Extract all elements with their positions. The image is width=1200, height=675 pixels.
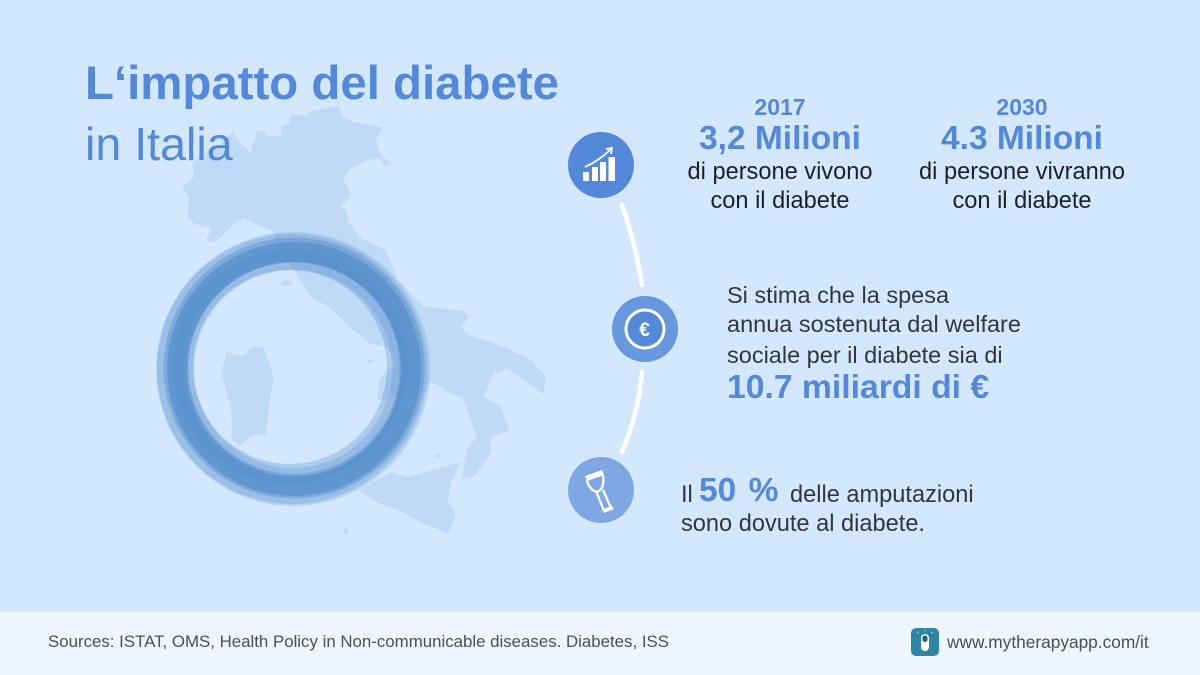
year 2017: 2017 (754, 94, 806, 120)
caption 2017 (688, 159, 872, 214)
footer (0, 612, 1200, 675)
amputations line 1: Il (681, 482, 693, 508)
connector: bottom arc (622, 372, 642, 452)
value 4.3 Milioni: 4.3 Milioni (941, 120, 1103, 157)
icon: euro coin: € (639, 320, 650, 341)
icon: euro coin (612, 296, 678, 362)
welfare text last line: sociale per il diabete sia di (727, 342, 1003, 368)
text block: welfare cost (727, 282, 1021, 406)
website: www.mytherapyapp.com/it (947, 632, 1149, 652)
amputations line 1: delle amputazioni (790, 482, 974, 508)
icon: growth chart (568, 132, 634, 198)
subtitle: in Italia (85, 118, 233, 170)
welfare text (727, 282, 1021, 337)
title: L‘impatto del diabete (85, 57, 559, 110)
caption 2030: di persone vivranno (919, 159, 1125, 185)
connector: top arc (622, 205, 642, 285)
amputations line 1 (681, 472, 974, 509)
stat: 2030 (919, 94, 1125, 214)
welfare text: annua sostenuta dal welfare (727, 311, 1021, 337)
icon: crutch (568, 457, 634, 523)
amputations line 2: sono dovute al diabete. (681, 511, 925, 537)
ring: blue circle (170, 247, 414, 491)
value 3,2 Milioni: 3,2 Milioni (699, 120, 861, 157)
icon: app logo (911, 628, 939, 656)
map: Italy silhouette (183, 107, 545, 534)
cost figure: 10.7 miliardi di € (727, 368, 989, 406)
caption 2017: di persone vivono (688, 159, 872, 185)
sources: Sources: ISTAT, OMS, Health Policy in Non-communicable diseases. Diabetes, ISS (48, 632, 669, 651)
year 2030: 2030 (996, 94, 1048, 120)
caption 2017: con il diabete (710, 188, 850, 214)
welfare text: Si stima che la spesa (727, 282, 949, 308)
caption 2030: con il diabete (952, 188, 1092, 214)
caption 2030 (919, 159, 1125, 214)
stat: 2017 (688, 94, 872, 214)
text block: amputations (681, 472, 974, 537)
amputations line 1: 50 % (699, 472, 778, 509)
